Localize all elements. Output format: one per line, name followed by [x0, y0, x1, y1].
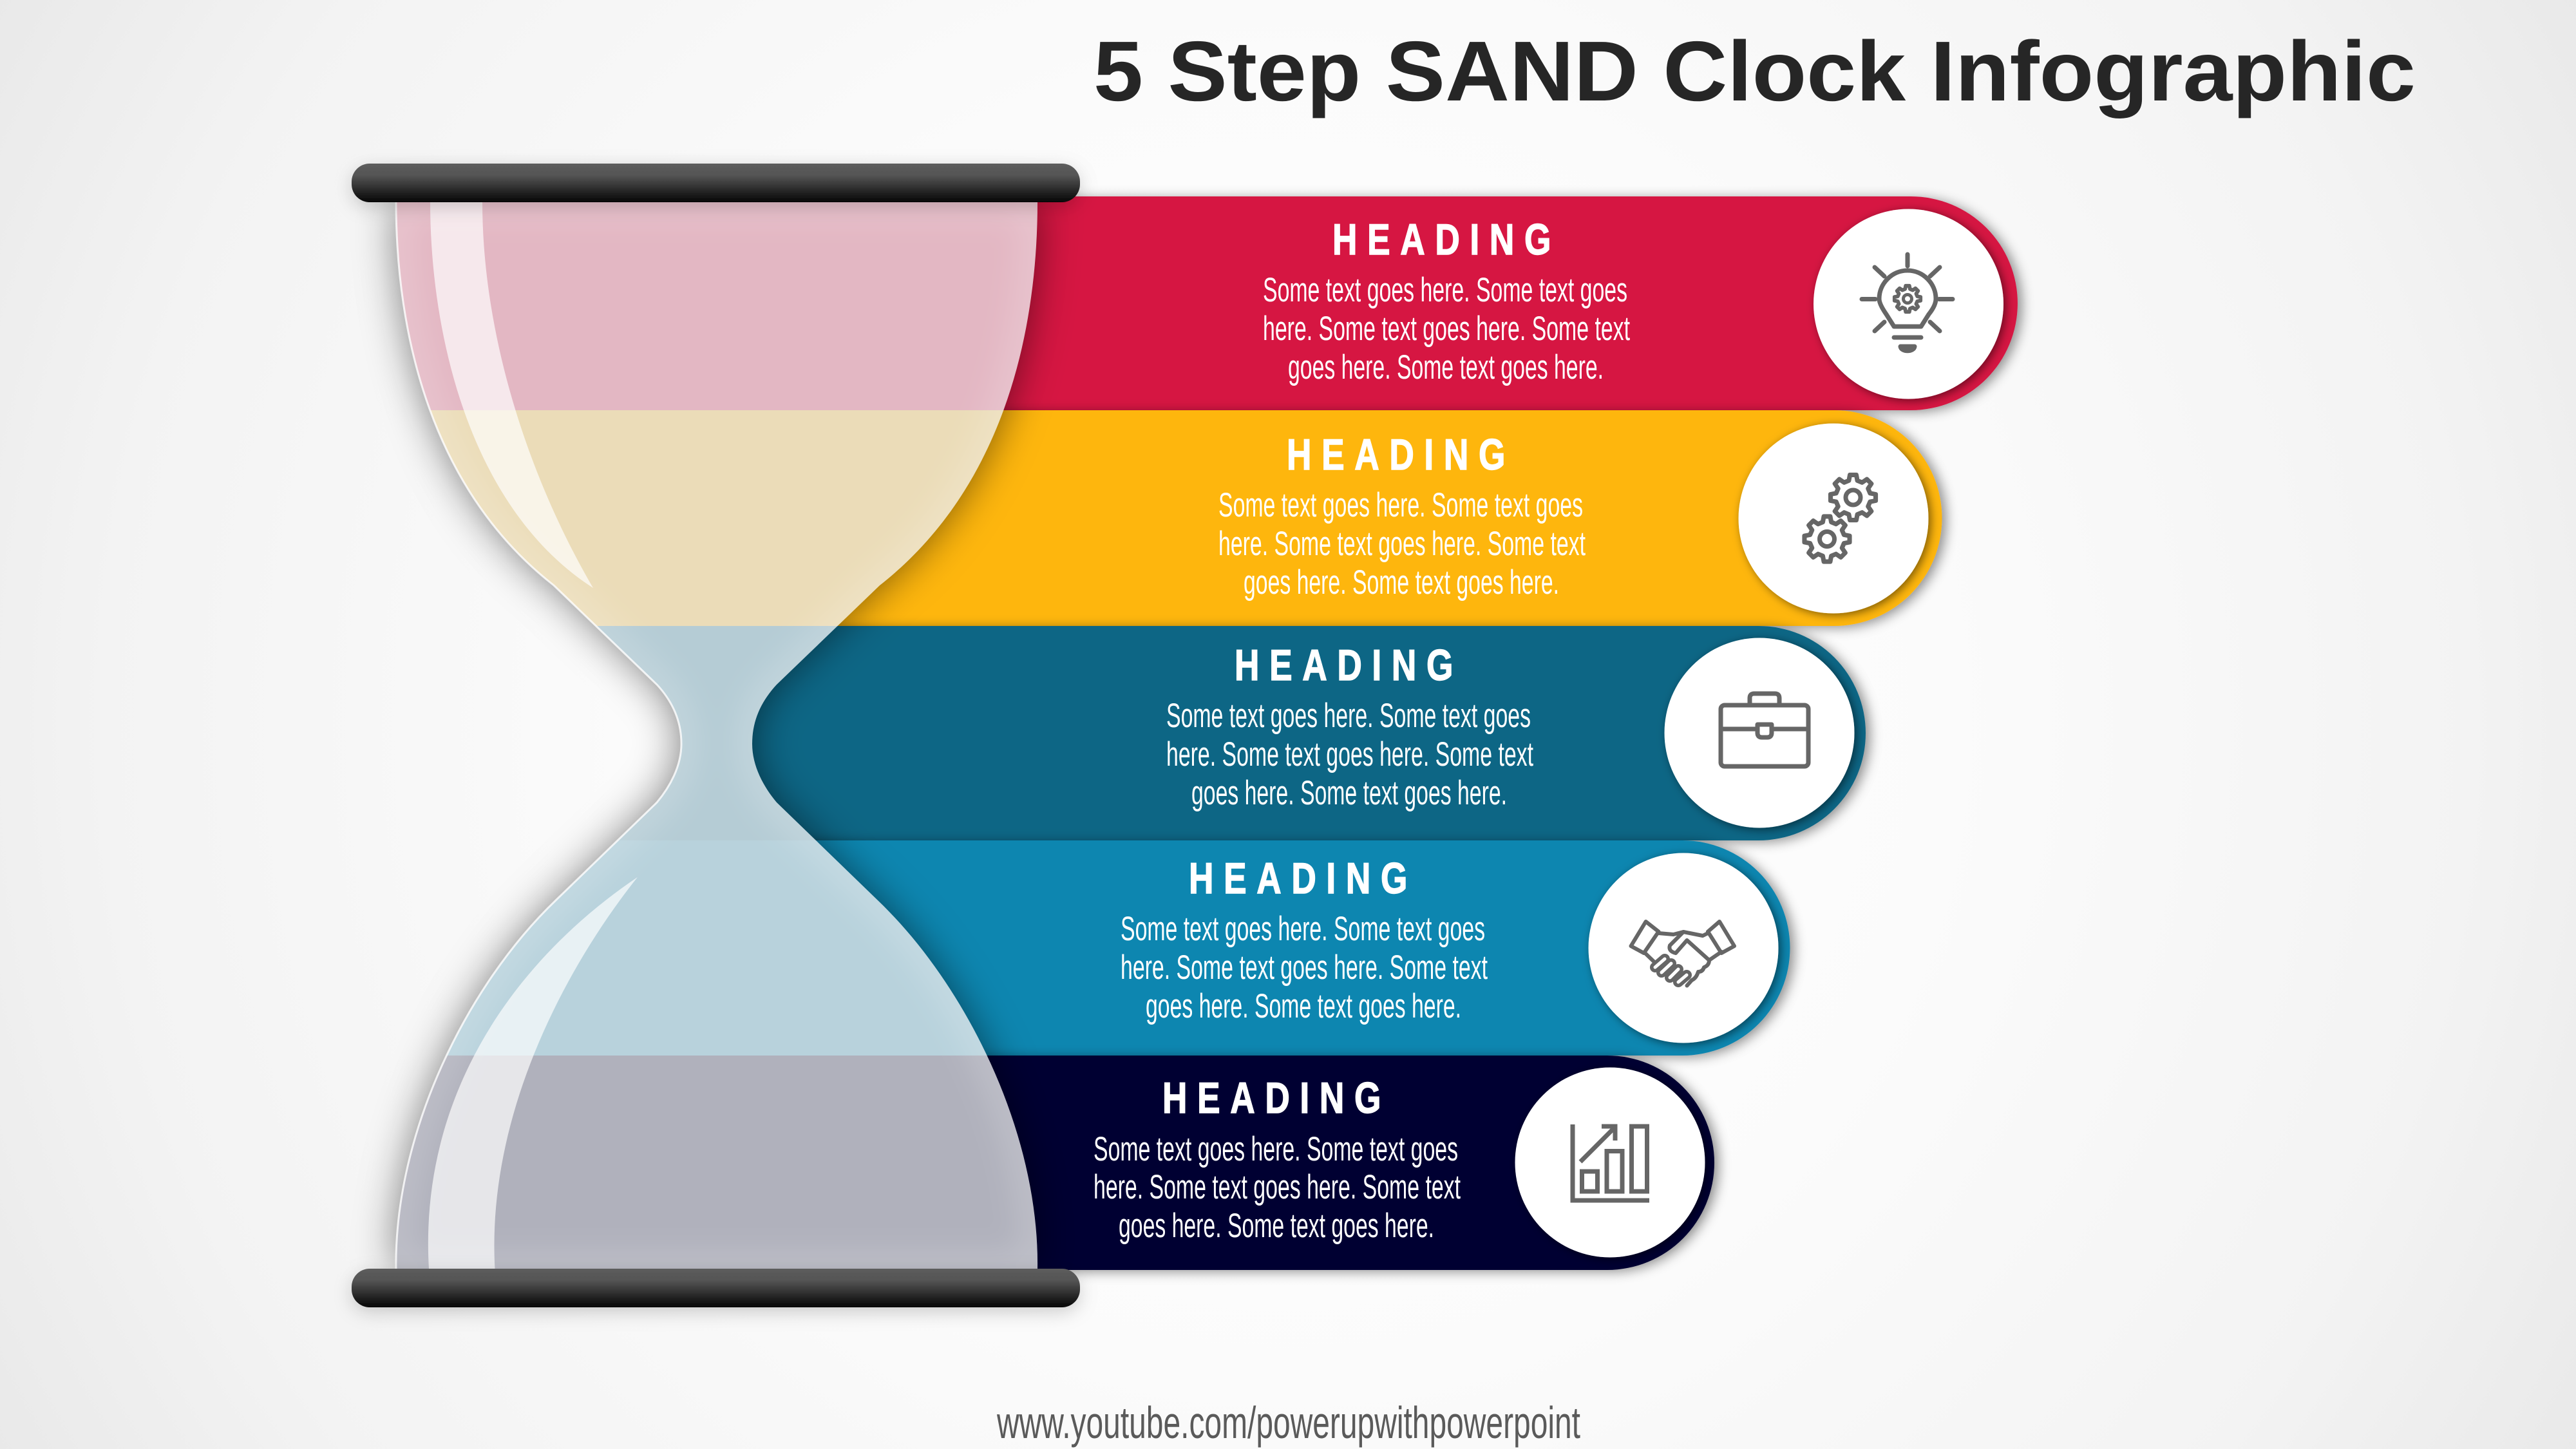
hourglass glass: [386, 193, 1050, 1274]
icon circle: [1588, 853, 1779, 1043]
glass rim: [396, 202, 681, 1269]
highlight: upper glass: [430, 202, 593, 588]
icon: light bulb with gear: [1862, 254, 1953, 351]
body text: [1094, 1130, 1461, 1245]
panel: step 4 blue: [717, 840, 1790, 1056]
icon circle: [1814, 209, 2003, 399]
icon: handshake: [1631, 922, 1734, 985]
heading: HEADING: [1287, 430, 1515, 479]
body text: here. Some text goes here. Some text: [1218, 525, 1586, 563]
panel: step 3 teal: [717, 626, 1866, 840]
icon circle: [1515, 1068, 1705, 1257]
hourglass shadow: [396, 202, 1037, 1269]
body text: goes here. Some text goes here.: [1146, 987, 1461, 1025]
highlight: lower glass: [428, 877, 638, 1269]
panel: step 2 yellow: [717, 410, 1942, 626]
body text: goes here. Some text goes here.: [1191, 774, 1507, 812]
band: [717, 410, 1942, 626]
body text: here. Some text goes here. Some text: [1094, 1168, 1461, 1206]
icon circle: [1739, 424, 1928, 613]
body text: Some text goes here. Some text goes: [1166, 697, 1531, 735]
band: [717, 196, 2018, 410]
body text: here. Some text goes here. Some text: [1263, 310, 1630, 348]
hourglass bottom cap: [352, 1269, 1080, 1307]
heading: HEADING: [1235, 641, 1463, 690]
body text: [1218, 486, 1586, 601]
icon circle: [1664, 638, 1855, 828]
panel: step 5 navy: [717, 1056, 1714, 1270]
body text: Some text goes here. Some text goes: [1263, 271, 1627, 309]
body text: [1263, 271, 1630, 386]
footer url: www.youtube.com/powerupwithpowerpoint: [996, 1397, 1580, 1448]
body text: Some text goes here. Some text goes: [1218, 486, 1583, 524]
band: [717, 626, 1866, 840]
band: [717, 1056, 1714, 1270]
heading: HEADING: [1162, 1074, 1391, 1122]
icon: bar chart with arrow: [1573, 1124, 1649, 1200]
glass colour bands: [386, 193, 1050, 1274]
body text: [1121, 910, 1488, 1025]
body text: Some text goes here. Some text goes: [1121, 910, 1485, 948]
body text: goes here. Some text goes here.: [1119, 1207, 1434, 1245]
body text: Some text goes here. Some text goes: [1094, 1130, 1458, 1168]
body text: [1166, 697, 1533, 812]
icon: gears: [1804, 475, 1876, 562]
band: [717, 840, 1790, 1056]
title: 5 Step SAND Clock Infographic: [1094, 24, 2416, 118]
heading: HEADING: [1332, 215, 1561, 264]
hourglass top cap: [352, 164, 1080, 202]
icon: briefcase: [1721, 694, 1808, 766]
body text: goes here. Some text goes here.: [1288, 348, 1604, 386]
panel: step 1 red: [717, 196, 2018, 410]
body text: here. Some text goes here. Some text: [1121, 949, 1488, 987]
body text: here. Some text goes here. Some text: [1166, 735, 1533, 773]
heading: HEADING: [1189, 854, 1417, 903]
body text: goes here. Some text goes here.: [1244, 564, 1559, 601]
